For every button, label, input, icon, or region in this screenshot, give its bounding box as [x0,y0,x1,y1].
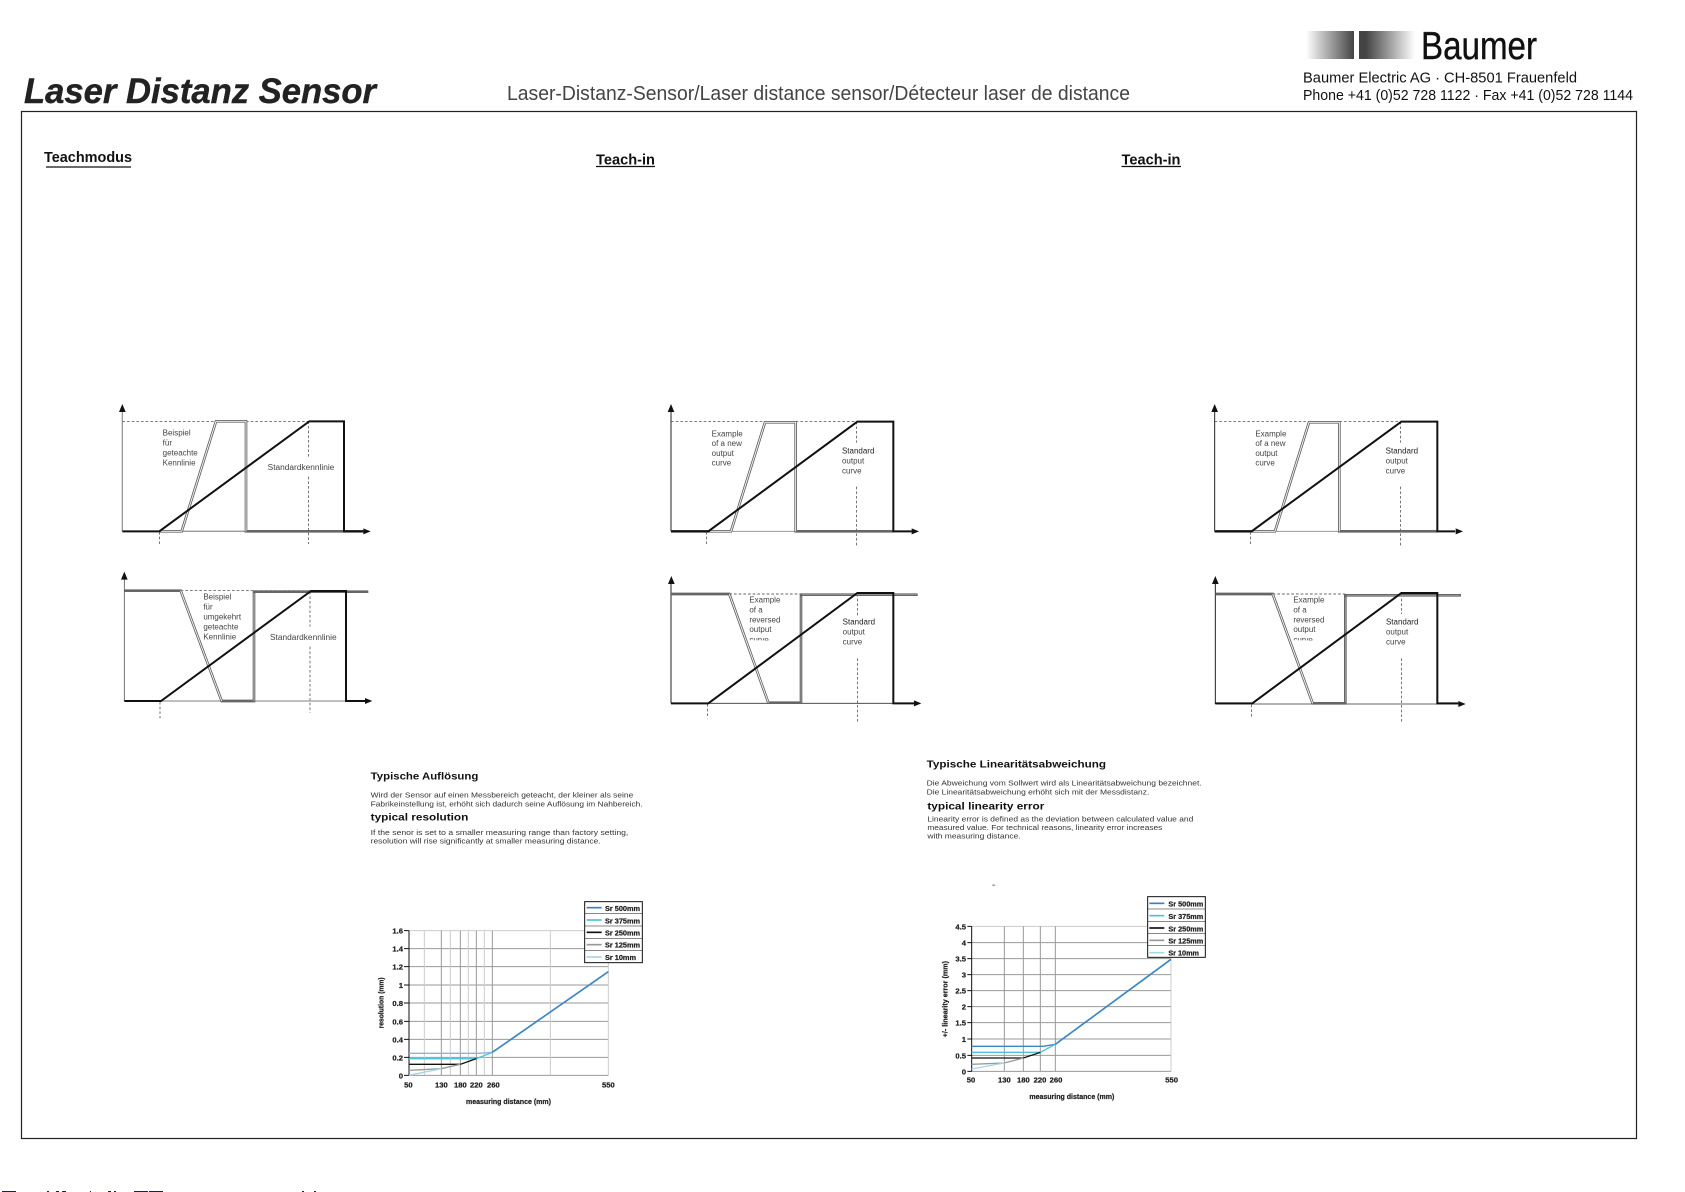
axis tick labels: 2.5 [955,987,967,996]
y axis title: resolution (mm) [377,977,386,1028]
text block: resolution: Typische Auflösung [371,772,478,783]
chart: new output curve: curve [842,466,862,475]
axis tick labels: 130 [998,1076,1011,1085]
axis tick labels: 0.4 [392,1035,404,1044]
chart: new output curve [1211,404,1463,547]
text block: linearity error: Die Linearitätsabweichung erhöht sich mit der Messdistanz. [927,787,1149,796]
chart: new output curve: output [712,449,735,458]
chart: reversed output curve: output [1386,627,1409,636]
text block: linearity error: Die Abweichung vom Sollwert wird als Linearitätsabweichung bezeichnet. [927,779,1202,788]
chart: new output curve: output [1255,449,1278,458]
axis tick labels: 1.6 [392,927,403,936]
chart: reversed output curve: output [749,625,772,634]
chart: new output curve: output [842,456,865,465]
axis tick labels: 1 [399,981,404,990]
chart: reversed taught curve: Beispiel [203,592,232,601]
axis tick labels: 220 [1034,1076,1046,1085]
chart: new output curve: Standard [1386,446,1418,455]
legend: Sr 500mm [1168,902,1203,909]
axis tick labels: 1.2 [392,963,403,972]
axis tick labels: 130 [435,1081,448,1090]
chart: reversed output curve: of a [1293,605,1307,614]
axis tick labels: 0.6 [392,1017,403,1026]
axis tick labels: 260 [487,1081,500,1090]
axis tick labels: 550 [1165,1076,1178,1085]
chart: taught curve: Kennlinie [163,458,196,467]
chart: new output curve: curve [1386,466,1406,475]
axis tick labels: 0.5 [955,1051,967,1060]
axis tick labels: 0.2 [392,1053,403,1062]
company contact details: Phone +41 (0)52 728 1122 · Fax +41 (0)52 728 1144 [1303,88,1633,104]
axis tick labels: 550 [602,1081,615,1090]
legend: Sr 500mm [605,906,640,913]
chart: new output curve: Example [1255,429,1287,438]
chart: taught curve [119,404,371,544]
axis tick labels: 50 [967,1076,975,1085]
chart: reversed taught curve [121,572,372,718]
title: Laser Distanz Sensor [24,72,378,111]
chart: new output curve [668,404,919,547]
text block: resolution: Wird der Sensor auf einen Messbereich geteacht, der kleiner als seine [371,791,633,800]
axis tick labels: 2 [962,1003,966,1012]
chart: taught curve: Beispiel [163,428,191,437]
axis tick labels: 4.5 [955,922,967,931]
axis tick labels: 0 [962,1067,966,1076]
text block: resolution: Fabrikeinstellung ist, erhöht sich dadurch seine Auflösung im Nahbereich. [371,800,643,809]
legend: Sr 375mm [1168,914,1203,921]
x axis title: measuring distance (mm) [1029,1092,1115,1101]
chart: reversed output curve: Example [749,596,781,605]
legend: Sr 125mm [605,943,640,950]
chart: reversed output curve: reversed [1293,615,1324,624]
y axis title: +/- linearity error (mm) [941,961,950,1037]
chart: reversed output curve: curve [1386,637,1406,646]
chart: reversed taught curve: Standardkennlinie [270,633,337,642]
chart: new output curve: of a new [1255,439,1286,448]
chart: reversed output curve: curve [749,635,769,644]
chart: reversed output curve: output [1293,625,1316,634]
text block: resolution: resolution will rise significantly at smaller measuring distance. [371,836,601,845]
axis tick labels: 1 [962,1035,967,1044]
company contact details [1303,70,1633,104]
legend [585,902,642,963]
axis tick labels: 260 [1050,1076,1062,1085]
text block: resolution [371,772,643,845]
chart: reversed output curve: curve [843,637,863,646]
axis tick labels: 4 [962,939,967,948]
chart: reversed taught curve: für [203,602,213,611]
chart: reversed output curve: curve [1293,635,1313,644]
logo: Baumer [1306,25,1537,68]
text block: linearity error: Linearity error is defined as the deviation between calculated value and [927,815,1193,824]
chart: new output curve: Standard [842,446,874,455]
axis tick labels: 1.4 [392,945,404,954]
heading: Teach-in (third column): Teach-in [1122,152,1180,168]
chart: new output curve: output [1386,456,1409,465]
data lines [972,959,1171,1069]
axis tick labels: 50 [404,1081,413,1090]
legend: Sr 250mm [605,931,640,938]
axis tick labels: 180 [1017,1076,1030,1085]
x axis title: measuring distance (mm) [466,1097,551,1106]
axis tick labels [955,922,1178,1085]
text block: linearity error: with measuring distance. [926,831,1021,840]
panel: English output curve diagrams, column 2 [668,404,921,722]
chart: reversed output curve: Standard [843,617,875,626]
axis tick labels: 3 [962,971,966,980]
chart: reversed output curve: output [843,627,866,636]
chart: taught curve: geteachte [163,448,198,457]
text block: linearity error: typical linearity error [927,801,1044,812]
chart: reversed taught curve: Kennlinie [203,632,237,641]
heading: Teachmodus: Teachmodus [44,149,132,166]
chart: new output curve: curve [1255,458,1275,467]
chart: reversed output curve: reversed [749,615,780,624]
axis tick labels: 1.5 [955,1019,967,1028]
chart: taught curve: Standardkennlinie [268,463,335,472]
chart: reversed output curve: Standard [1386,617,1418,626]
axis tick labels: 3.5 [955,955,967,964]
chart: reversed output curve [668,576,921,722]
chart: reversed taught curve: umgekehrt [203,612,242,621]
text block: resolution: typical resolution [371,813,468,824]
axis tick labels: 0 [399,1071,403,1080]
text block: linearity error [926,759,1202,840]
chart: reversed output curve: Example [1293,596,1325,605]
legend: Sr 375mm [605,918,640,925]
text block: linearity error: measured value. For technical reasons, linearity error increases [927,823,1163,832]
chart: typical linearity error [941,885,1205,1101]
heading: Teach-in (English column): Teach-in [596,152,655,168]
chart: new output curve: of a new [712,439,742,448]
legend [1148,897,1205,957]
logo: Baumer: Baumer [1421,25,1537,68]
text block: resolution: If the senor is set to a smaller measuring range than factory setting, [371,828,628,837]
chart: new output curve: curve [712,458,732,467]
panel: German output curve diagrams [119,404,372,718]
legend: Sr 250mm [1168,926,1203,933]
legend: Sr 10mm [1168,950,1199,957]
axis tick labels: 180 [454,1081,467,1090]
chart: reversed output curve: of a [749,605,763,614]
legend: Sr 125mm [1168,938,1203,945]
chart: typical resolution [377,902,642,1106]
subtitle: Laser-Distanz-Sensor/Laser distance sensor/Détecteur laser de distance [507,83,1130,105]
panel: English output curve diagrams, column 3 [1211,404,1466,722]
chart: taught curve: für [163,438,172,447]
chart: new output curve: Example [712,429,743,438]
legend: Sr 10mm [605,955,636,962]
chart: reversed taught curve: geteachte [203,622,239,631]
axis tick labels: 0.8 [392,999,404,1008]
axis tick labels: 220 [470,1081,483,1090]
text block: linearity error: Typische Linearitätsabweichung [927,759,1106,770]
data lines [409,972,608,1075]
company contact details: Baumer Electric AG · CH-8501 Frauenfeld [1303,70,1577,86]
axis tick labels [392,927,615,1090]
chart: reversed output curve [1212,576,1466,722]
